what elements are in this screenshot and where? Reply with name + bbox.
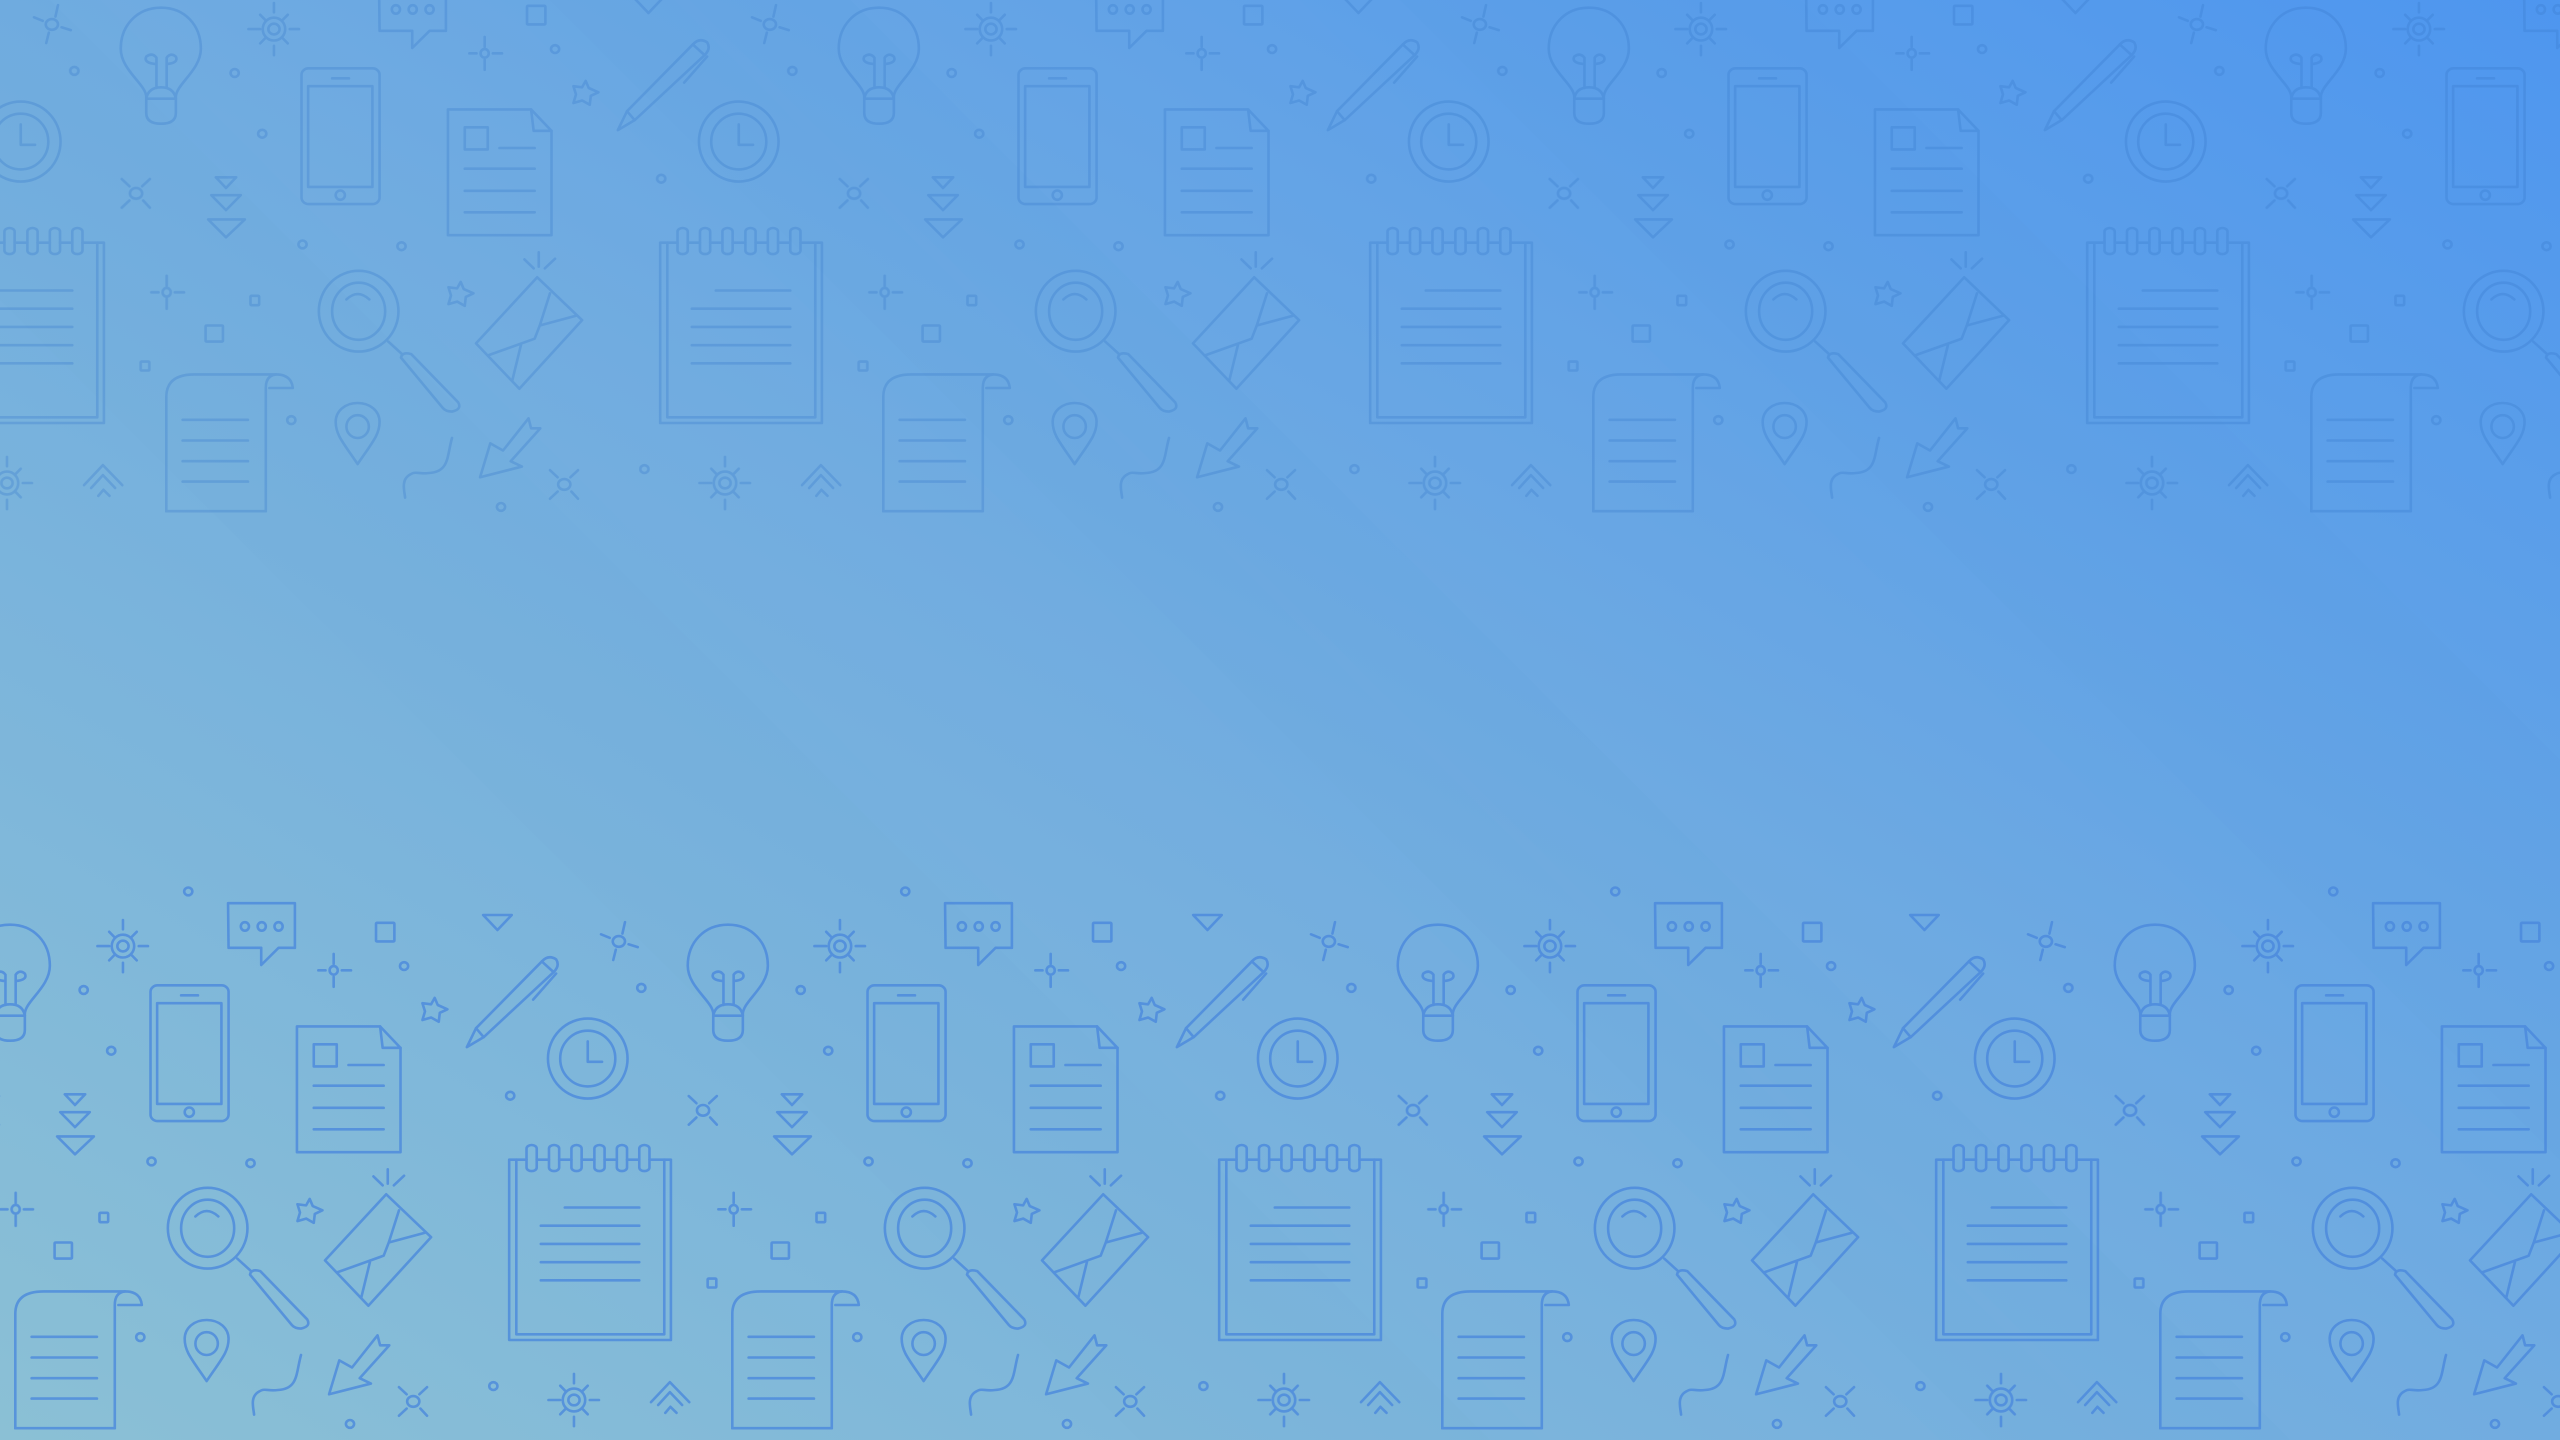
icon tile 3 left part, bottom band (732, 887, 1164, 1428)
icon tile 3 left part, top band (883, 0, 1315, 511)
icon tile 2 left part: phone, document, chat, magnifier, envelope, scroll, bottom band (15, 887, 447, 1428)
icon tile 2 left part: phone, document, chat, magnifier, envelope, scroll, top band (166, 0, 598, 511)
icon tile 5 left part, bottom band (2160, 887, 2560, 1428)
icon tile 4 left part, bottom band (1442, 887, 1874, 1428)
bottom icon band (0, 887, 2560, 1428)
icon tile 4 right part, top band (2045, 0, 2346, 509)
icon tile 4 right part, bottom band (1894, 915, 2195, 1426)
icon tile 2 right part: bulb, notebook, clock, pen, bottom band (467, 915, 768, 1426)
icon tile 3 right part, top band (1328, 0, 1629, 509)
icon tile 3 right part, bottom band (1177, 915, 1478, 1426)
icon tile 2 right part, top band (618, 0, 919, 509)
top icon band (0, 0, 2560, 511)
icon tile 5 left part, top band (2311, 0, 2560, 511)
icon tile 1 right part: bulb, notebook, clock, pen, top band (0, 0, 201, 509)
icon tile 1 right part: bulb, bottom band (0, 915, 50, 1426)
icon tile 4 left part, top band (1593, 0, 2025, 511)
